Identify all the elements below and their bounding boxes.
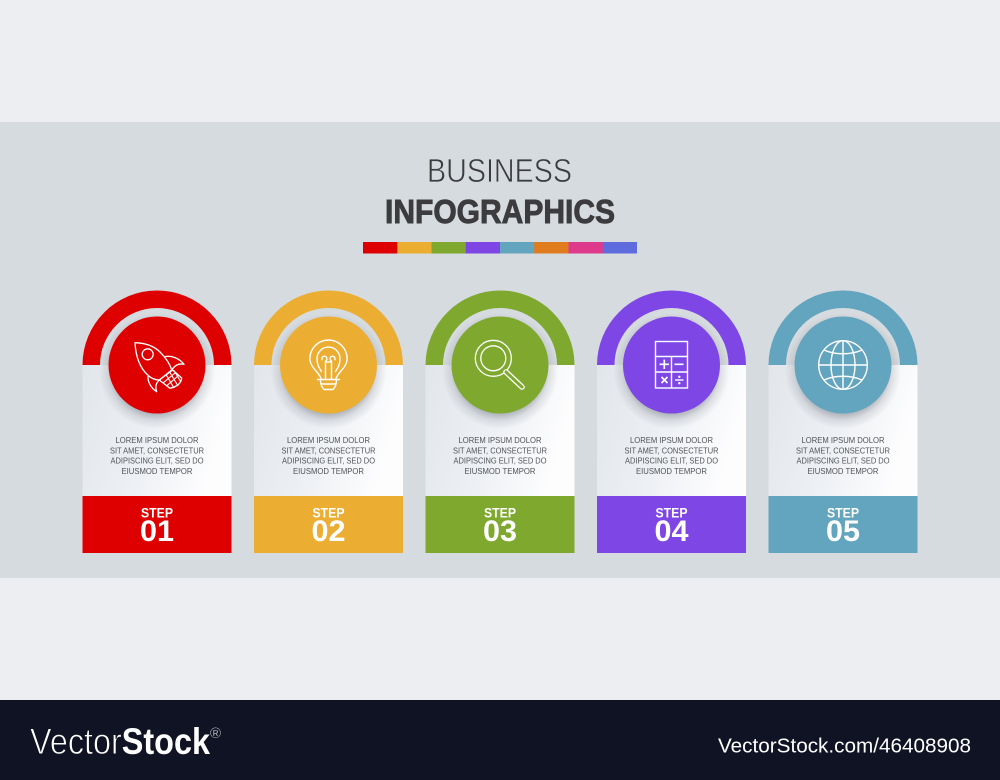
circle shadow [270, 313, 386, 429]
step footer: 05 [826, 515, 860, 548]
arch [254, 290, 403, 365]
watermark footer bar [0, 700, 1000, 780]
card body [768, 365, 918, 496]
step footer: STEP [312, 506, 344, 520]
description [282, 435, 376, 476]
step footer: STEP [656, 506, 688, 520]
circle shadow [785, 313, 901, 429]
card: step 05 [768, 290, 918, 553]
description: EIUSMOD TEMPOR [293, 466, 364, 476]
step footer: STEP [141, 506, 173, 520]
arch [82, 290, 232, 365]
description: ADIPISCING ELIT, SED DO [796, 456, 890, 466]
step footer: STEP [827, 506, 859, 520]
description: ADIPISCING ELIT, SED DO [454, 456, 547, 466]
description: LOREM IPSUM DOLOR [287, 435, 370, 445]
step footer: STEP [484, 506, 516, 520]
description [796, 435, 890, 476]
step footer [254, 496, 403, 553]
image id: VectorStock.com/46408908 [718, 734, 971, 758]
step footer [597, 496, 746, 553]
card body [426, 365, 574, 496]
title line: infographics: INFOGRAPHICS [385, 193, 615, 230]
step footer: 01 [140, 515, 174, 548]
description: SIT AMET, CONSECTETUR [110, 445, 204, 455]
rainbow divider bar [363, 242, 637, 254]
description: SIT AMET, CONSECTETUR [796, 445, 890, 455]
title line: business: BUSINESS [427, 152, 572, 189]
circle [452, 316, 548, 414]
description: LOREM IPSUM DOLOR [458, 435, 542, 445]
description: SIT AMET, CONSECTETUR [453, 445, 547, 455]
circle shadow [442, 313, 558, 429]
description: ADIPISCING ELIT, SED DO [282, 456, 375, 466]
grey band [0, 122, 1000, 578]
description: EIUSMOD TEMPOR [464, 466, 536, 476]
card: step 02 [254, 290, 403, 553]
description: SIT AMET, CONSECTETUR [282, 445, 376, 455]
card: step 04 [597, 290, 746, 553]
circle [623, 316, 720, 414]
card: step 03 [426, 290, 574, 553]
step footer: 02 [312, 515, 346, 548]
description: EIUSMOD TEMPOR [808, 466, 878, 476]
description [453, 435, 547, 476]
step footer: 04 [654, 515, 689, 548]
description [110, 435, 204, 476]
description: LOREM IPSUM DOLOR [802, 435, 884, 445]
step footer: 03 [483, 515, 517, 548]
icon: light bulb [310, 340, 347, 390]
description: ADIPISCING ELIT, SED DO [625, 456, 718, 466]
card: step 01 [82, 290, 232, 553]
description: SIT AMET, CONSECTETUR [624, 445, 718, 455]
circle [794, 316, 892, 414]
arch [426, 290, 574, 365]
arch [597, 290, 746, 365]
icon: magnifier [475, 340, 522, 387]
icon: rocket [135, 343, 184, 392]
circle shadow [99, 313, 215, 429]
card body [254, 365, 403, 496]
registered mark: ® [210, 725, 221, 742]
icon: calculator [656, 342, 688, 388]
description: EIUSMOD TEMPOR [122, 466, 192, 476]
description: EIUSMOD TEMPOR [636, 466, 707, 476]
circle [280, 316, 377, 414]
description: ADIPISCING ELIT, SED DO [110, 456, 204, 466]
card body [82, 365, 232, 496]
arch [768, 290, 918, 365]
description [624, 435, 718, 476]
step footer [426, 496, 574, 553]
icon: globe [819, 341, 867, 389]
description: LOREM IPSUM DOLOR [116, 435, 198, 445]
step footer [768, 496, 918, 553]
card body [597, 365, 746, 496]
logo text: VectorStock [30, 720, 210, 762]
circle shadow [614, 313, 730, 429]
title [385, 152, 615, 230]
circle [108, 316, 206, 414]
description: LOREM IPSUM DOLOR [630, 435, 713, 445]
step footer [82, 496, 232, 553]
